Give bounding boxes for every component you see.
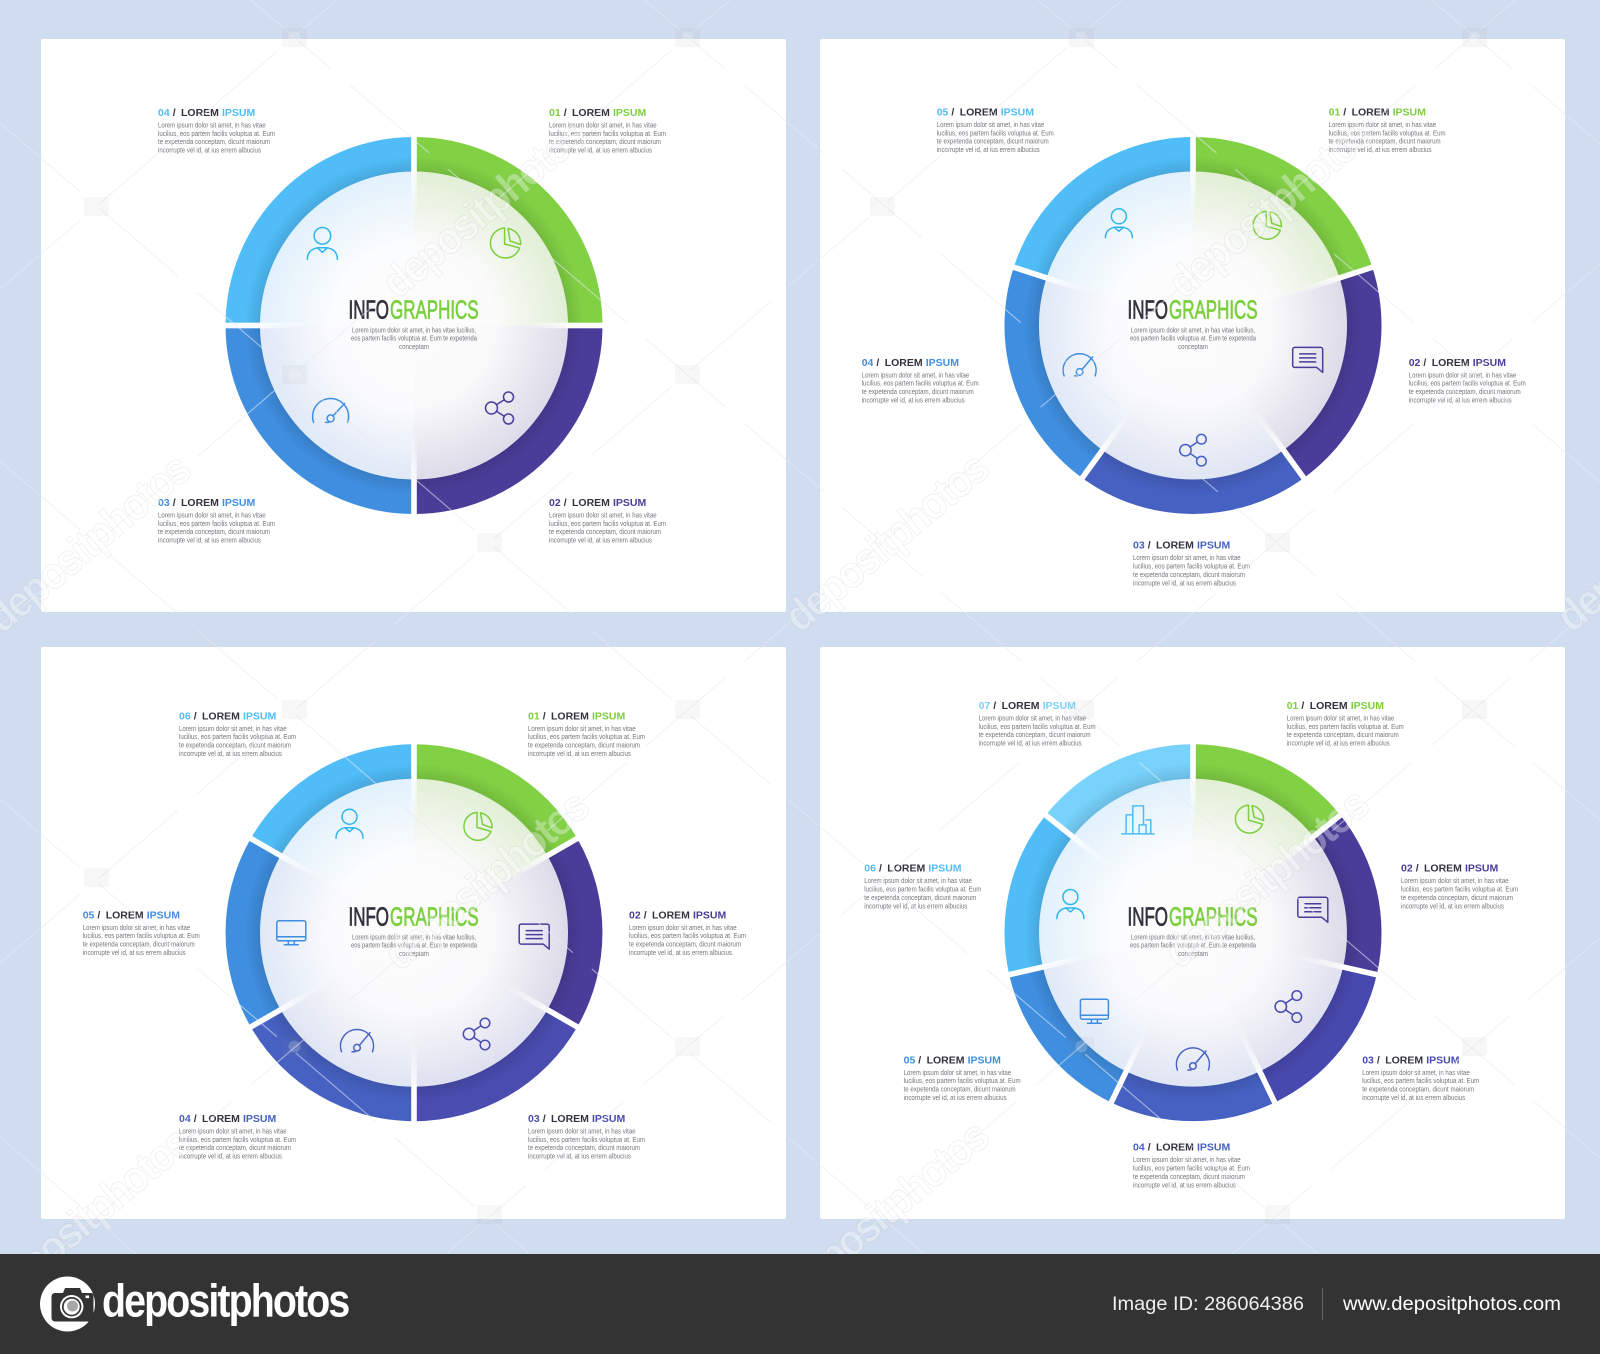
text block: 02: LOREM: [1424, 863, 1462, 875]
text block: 06: [179, 710, 296, 758]
text block: 02: LOREM: [652, 909, 690, 921]
text block: 06: te expetenda conceptam, dicunt maiorum: [179, 741, 291, 750]
text block: 01: [528, 710, 645, 758]
text block: 04: lucilius, eos partem facilis voluptua at. Eum: [158, 129, 275, 138]
text block: 04: incorrupte vel id, at ius errem albucius: [158, 146, 261, 155]
text block: 04: te expetenda conceptam, dicunt maiorum: [179, 1143, 291, 1152]
text block: 07: IPSUM: [1043, 700, 1076, 712]
text block: 02: te expetenda conceptam, dicunt maiorum: [629, 940, 741, 949]
icon: monitor: [1080, 999, 1108, 1023]
text block: 01: IPSUM: [613, 107, 647, 119]
chart: seven segment ring: [1004, 742, 1382, 1121]
chart: six segment ring: [226, 742, 602, 1124]
text block: 05: IPSUM: [968, 1054, 1001, 1066]
text block: 02: 02: [549, 497, 561, 509]
text block: 03: te expetenda conceptam, dicunt maiorum: [528, 1143, 640, 1152]
text block: 06: 06: [864, 863, 876, 875]
text block: 02: /: [564, 497, 567, 509]
text block: 02: [629, 909, 746, 957]
panel: six-step circle chart: [41, 647, 786, 1219]
panel: four-step circle chart: [41, 39, 786, 612]
watermark: repeating stock-photo marks: depositphotos: [375, 781, 597, 979]
panel: seven-step circle chart: [820, 647, 1565, 1219]
text block: 05: incorrupte vel id, at ius errem albucius: [937, 145, 1040, 154]
text block: 04: [158, 107, 275, 155]
icon: gauge: [1176, 1048, 1209, 1070]
center title: INFO: [348, 904, 389, 932]
text block: 01: /: [564, 107, 567, 119]
text block: 01: 01: [1329, 106, 1340, 118]
center title: GRAPHICS: [1169, 296, 1258, 324]
text block: 04: IPSUM: [243, 1113, 277, 1125]
text block: 04: incorrupte vel id, at ius errem albucius: [862, 395, 965, 404]
center title: Lorem ipsum dolor sit amet, in has vitae lucilius,: [1131, 326, 1255, 334]
text block: 01: Lorem ipsum dolor sit amet, in has vitae: [1329, 120, 1436, 129]
text block: 04: 04: [179, 1113, 191, 1125]
text block: 05: te expetenda conceptam, dicunt maiorum: [937, 137, 1049, 146]
text block: 01: /: [1301, 700, 1304, 712]
text block: 07: 07: [979, 700, 990, 712]
text block: 03: incorrupte vel id, at ius errem albucius: [1133, 578, 1236, 587]
text block: 02: IPSUM: [1473, 357, 1506, 369]
text block: 01: 01: [528, 710, 540, 722]
text block: 01: IPSUM: [592, 710, 626, 722]
text block: 03: [158, 497, 275, 545]
text block: 03: Lorem ipsum dolor sit amet, in has vitae: [528, 1126, 636, 1136]
text block: 07: incorrupte vel id, at ius errem albucius: [979, 739, 1082, 748]
text block: 03: Lorem ipsum dolor sit amet, in has vitae: [158, 510, 266, 520]
icon: monitor: [277, 921, 306, 945]
text block: 02: IPSUM: [613, 497, 647, 509]
text block: 05: lucilius, eos partem facilis voluptua at. Eum: [83, 931, 200, 940]
text block: 02: 02: [1401, 863, 1413, 875]
text block: 05: IPSUM: [1001, 106, 1034, 118]
text block: 02: Lorem ipsum dolor sit amet, in has vitae: [1409, 370, 1516, 379]
text block: 04: [862, 357, 979, 404]
text block: 06: lucilius, eos partem facilis voluptua at. Eum: [864, 885, 981, 894]
text block: 01: lucilius, eos partem facilis voluptua at. Eum: [528, 732, 645, 741]
icon: gauge: [313, 398, 349, 422]
text block: 01: te expetenda conceptam, dicunt maiorum: [528, 741, 640, 750]
text block: 03: te expetenda conceptam, dicunt maiorum: [1133, 570, 1245, 579]
text block: 05: incorrupte vel id, at ius errem albucius: [904, 1093, 1007, 1102]
text block: 05: Lorem ipsum dolor sit amet, in has vitae: [904, 1068, 1011, 1077]
text block: 02: incorrupte vel id, at ius errem albucius: [1401, 901, 1504, 910]
icon: pie chart: [464, 812, 492, 840]
text block: 05: LOREM: [106, 909, 144, 921]
icon: chat bubble: [1298, 897, 1328, 922]
text block: 05: 05: [937, 106, 949, 118]
center title: [1128, 296, 1258, 351]
text block: 04: 04: [1133, 1142, 1145, 1154]
text block: 01: Lorem ipsum dolor sit amet, in has vitae: [1287, 714, 1394, 722]
text block: 04: /: [876, 357, 879, 369]
text block: 02: incorrupte vel id, at ius errem albucius: [1409, 395, 1512, 404]
text block: 01: lucilius, eos partem facilis voluptua at. Eum: [1329, 128, 1446, 137]
center title: Lorem ipsum dolor sit amet, in has vitae lucilius,: [1131, 933, 1255, 942]
text block: 03: /: [1377, 1054, 1380, 1066]
text block: 06: LOREM: [202, 710, 240, 722]
text block: 04: IPSUM: [926, 357, 959, 369]
text block: 02: te expetenda conceptam, dicunt maiorum: [1401, 893, 1513, 902]
text block: 05: lucilius, eos partem facilis voluptua at. Eum: [937, 128, 1054, 137]
center title: eos partem facilis voluptua at. Eum te expetenda: [351, 941, 478, 950]
center title: INFO: [348, 296, 389, 324]
text block: 06: /: [194, 710, 197, 722]
icon: share nodes: [486, 392, 514, 424]
text block: 01: incorrupte vel id, at ius errem albucius: [1329, 145, 1432, 154]
text block: 02: Lorem ipsum dolor sit amet, in has vitae: [1401, 876, 1509, 885]
text block: 06: te expetenda conceptam, dicunt maiorum: [864, 893, 976, 902]
text block: 06: Lorem ipsum dolor sit amet, in has vitae: [864, 876, 972, 885]
text block: 01: LOREM: [572, 107, 610, 119]
text block: 04: 04: [158, 107, 170, 119]
center title: [348, 904, 479, 958]
text block: 01: Lorem ipsum dolor sit amet, in has vitae: [549, 120, 657, 130]
text block: 05: [904, 1054, 1021, 1102]
text block: 04: LOREM: [1156, 1142, 1194, 1154]
text block: 03: lucilius, eos partem facilis voluptua at. Eum: [1362, 1076, 1479, 1085]
icon: pie chart: [1235, 805, 1264, 833]
text block: 04: te expetenda conceptam, dicunt maiorum: [862, 387, 974, 396]
text block: 02: incorrupte vel id, at ius errem albucius: [549, 536, 652, 545]
text block: 05: LOREM: [960, 106, 998, 118]
text block: 02: lucilius, eos partem facilis voluptua at. Eum: [1401, 885, 1518, 894]
text block: 01: lucilius, eos partem facilis voluptua at. Eum: [1287, 722, 1404, 731]
text block: 06: 06: [179, 710, 191, 722]
center title: [1128, 904, 1258, 958]
text block: 03: LOREM: [1156, 540, 1194, 552]
text block: 05: te expetenda conceptam, dicunt maiorum: [83, 940, 195, 949]
text block: 01: LOREM: [1352, 106, 1390, 118]
text block: 01: incorrupte vel id, at ius errem albucius: [528, 749, 631, 758]
text block: 02: IPSUM: [1465, 863, 1499, 875]
text block: 03: incorrupte vel id, at ius errem albucius: [528, 1152, 631, 1161]
watermark: repeating stock-photo marks: depositphotos: [1155, 779, 1377, 977]
text block: 01: te expetenda conceptam, dicunt maiorum: [1329, 137, 1441, 146]
text block: 04: [179, 1113, 296, 1161]
text block: 03: IPSUM: [222, 497, 256, 509]
center title: INFO: [1128, 296, 1168, 324]
text block: 01: 01: [1287, 700, 1299, 712]
center title: eos partem facilis voluptua at. Eum te expetenda: [1130, 941, 1257, 950]
text block: 02: 02: [1409, 357, 1421, 369]
text block: 06: incorrupte vel id, at ius errem albucius: [179, 749, 282, 758]
text block: 06: IPSUM: [928, 863, 962, 875]
text block: 03: IPSUM: [592, 1113, 626, 1125]
icon: pie chart: [490, 228, 521, 258]
text block: 05: IPSUM: [147, 909, 180, 921]
text block: 04: incorrupte vel id, at ius errem albucius: [1133, 1180, 1236, 1189]
text block: 01: /: [1343, 106, 1346, 118]
text block: 03: incorrupte vel id, at ius errem albucius: [1362, 1093, 1465, 1102]
text block: 07: /: [993, 700, 996, 712]
text block: 05: 05: [83, 909, 95, 921]
center title: conceptam: [399, 342, 429, 351]
text block: 03: lucilius, eos partem facilis voluptua at. Eum: [1133, 562, 1250, 571]
text block: 03: /: [1148, 540, 1151, 552]
text block: 03: Lorem ipsum dolor sit amet, in has vitae: [1362, 1068, 1470, 1077]
text block: 03: [1362, 1054, 1479, 1102]
text block: 02: LOREM: [572, 497, 610, 509]
icon: city buildings: [1122, 806, 1154, 834]
text block: 03: te expetenda conceptam, dicunt maiorum: [158, 527, 270, 536]
text block: 04: /: [1148, 1142, 1151, 1154]
text block: 03: /: [173, 497, 176, 509]
text block: 07: LOREM: [1002, 700, 1040, 712]
text block: 06: [864, 863, 981, 910]
bottom brand bar: [0, 1254, 1600, 1354]
text block: 05: /: [918, 1054, 921, 1066]
watermark: repeating stock-photo marks: depositphotos: [1159, 109, 1381, 307]
icon: chat bubble: [519, 924, 549, 949]
text block: 03: IPSUM: [1197, 540, 1231, 552]
text block: 05: [83, 909, 200, 957]
icon: share nodes: [463, 1018, 490, 1050]
text block: 03: 03: [528, 1113, 540, 1125]
text block: 02: Lorem ipsum dolor sit amet, in has vitae: [549, 510, 657, 520]
text block: 04: incorrupte vel id, at ius errem albucius: [179, 1152, 282, 1161]
center title: GRAPHICS: [390, 904, 479, 932]
text block: 04: Lorem ipsum dolor sit amet, in has vitae: [158, 120, 266, 130]
watermark: repeating stock-photo marks: depositphotos: [775, 1111, 997, 1309]
text block: 06: LOREM: [887, 863, 925, 875]
text block: 02: /: [1423, 357, 1426, 369]
text block: 06: Lorem ipsum dolor sit amet, in has vitae: [179, 724, 287, 733]
text block: 04: IPSUM: [222, 107, 256, 119]
text block: 05: lucilius, eos partem facilis voluptua at. Eum: [904, 1076, 1021, 1085]
text block: 04: /: [173, 107, 176, 119]
text block: 04: LOREM: [181, 107, 219, 119]
center title: conceptam: [399, 949, 429, 958]
text block: 02: [549, 497, 666, 545]
center title: eos partem facilis voluptua at. Eum te expetenda: [1130, 334, 1257, 342]
text block: 04: [1133, 1142, 1250, 1189]
text block: 02: te expetenda conceptam, dicunt maiorum: [549, 527, 661, 536]
text block: 04: lucilius, eos partem facilis voluptua at. Eum: [862, 379, 979, 388]
text block: 03: incorrupte vel id, at ius errem albucius: [158, 536, 261, 545]
text block: 05: /: [97, 909, 100, 921]
text block: 02: /: [1416, 863, 1419, 875]
logo wordmark: depositphotos: [102, 1276, 350, 1327]
center title: GRAPHICS: [1169, 904, 1258, 932]
text block: 06: /: [879, 863, 882, 875]
text block: 02: [1401, 863, 1518, 910]
text block: 01: [1329, 106, 1446, 154]
text block: 04: IPSUM: [1197, 1142, 1231, 1154]
panel: five-step circle chart: [820, 39, 1565, 612]
text block: 05: incorrupte vel id, at ius errem albucius: [83, 948, 186, 957]
center title: conceptam: [1178, 342, 1208, 351]
chart: five segment ring: [1004, 134, 1382, 514]
icon: person: [336, 809, 363, 838]
icon: pie chart: [1253, 211, 1281, 239]
text block: 02: Lorem ipsum dolor sit amet, in has vitae: [629, 923, 737, 932]
text block: 03: Lorem ipsum dolor sit amet, in has vitae: [1133, 553, 1241, 562]
text block: 04: /: [194, 1113, 197, 1125]
text block: 01: lucilius, eos partem facilis voluptua at. Eum: [549, 129, 666, 138]
text block: 01: [549, 107, 666, 155]
watermark: repeating stock-photo marks: depositphotos: [775, 443, 997, 641]
text block: 04: Lorem ipsum dolor sit amet, in has vitae: [862, 370, 969, 379]
text block: 03: [528, 1113, 645, 1161]
text block: 07: te expetenda conceptam, dicunt maiorum: [979, 730, 1091, 739]
text block: 04: Lorem ipsum dolor sit amet, in has vitae: [1133, 1155, 1241, 1164]
text block: 05: Lorem ipsum dolor sit amet, in has vitae: [937, 120, 1044, 129]
text block: 04: 04: [862, 357, 874, 369]
icon: person: [1105, 209, 1132, 238]
text block: 04: lucilius, eos partem facilis voluptua at. Eum: [1133, 1163, 1250, 1172]
icon: gauge: [340, 1030, 374, 1052]
icon: gauge: [1063, 354, 1096, 376]
text block: 05: [937, 106, 1054, 154]
chart: four segment ring: [223, 134, 605, 516]
text block: 04: lucilius, eos partem facilis voluptua at. Eum: [179, 1135, 296, 1144]
icon: person: [307, 228, 337, 259]
text block: 04: LOREM: [885, 357, 923, 369]
text block: 01: [1287, 700, 1404, 748]
text block: 02: /: [644, 909, 647, 921]
text block: 03: lucilius, eos partem facilis voluptua at. Eum: [528, 1135, 645, 1144]
center title: [348, 296, 479, 351]
text block: 01: incorrupte vel id, at ius errem albucius: [549, 146, 652, 155]
text block: 02: [1409, 357, 1526, 404]
icon: person: [1057, 890, 1084, 918]
text block: 02: incorrupte vel id, at ius errem albucius: [629, 948, 732, 957]
text block: 04: te expetenda conceptam, dicunt maiorum: [1133, 1172, 1245, 1181]
text block: 03: LOREM: [181, 497, 219, 509]
text block: 01: LOREM: [1310, 700, 1348, 712]
text block: 02: lucilius, eos partem facilis voluptua at. Eum: [629, 931, 746, 940]
text block: 01: te expetenda conceptam, dicunt maiorum: [1287, 730, 1399, 739]
text block: 06: incorrupte vel id, at ius errem albucius: [864, 901, 967, 910]
text block: 01: te expetenda conceptam, dicunt maiorum: [549, 137, 661, 146]
text block: 02: IPSUM: [693, 909, 727, 921]
logo icon: camera in circle: [40, 1276, 95, 1332]
text block: 03: 03: [1362, 1054, 1374, 1066]
text block: 03: LOREM: [551, 1113, 589, 1125]
text block: 05: /: [951, 106, 954, 118]
text block: 07: lucilius, eos partem facilis voluptua at. Eum: [979, 722, 1096, 731]
text block: 06: IPSUM: [243, 710, 277, 722]
text block: 04: Lorem ipsum dolor sit amet, in has vitae: [179, 1126, 287, 1136]
text block: 02: 02: [629, 909, 641, 921]
text block: 07: [979, 700, 1096, 748]
text block: 01: 01: [549, 107, 561, 119]
text block: 03: 03: [1133, 540, 1145, 552]
text block: 03: 03: [158, 497, 170, 509]
text block: 03: LOREM: [1385, 1054, 1423, 1066]
icon: share nodes: [1275, 991, 1302, 1022]
center title: eos partem facilis voluptua at. Eum te expetenda: [351, 334, 478, 342]
text block: 06: lucilius, eos partem facilis voluptua at. Eum: [179, 732, 296, 741]
text block: 02: LOREM: [1432, 357, 1470, 369]
text block: 01: /: [543, 710, 546, 722]
center title: GRAPHICS: [390, 296, 479, 324]
text block: 03: IPSUM: [1426, 1054, 1460, 1066]
text block: 02: lucilius, eos partem facilis voluptua at. Eum: [549, 519, 666, 528]
text block: 07: Lorem ipsum dolor sit amet, in has vitae: [979, 714, 1086, 722]
text block: 05: 05: [904, 1054, 915, 1066]
center title: Lorem ipsum dolor sit amet, in has vitae lucilius,: [352, 326, 476, 334]
image id: Image ID: 286064386: [1112, 1293, 1304, 1315]
icon: chat bubble: [1293, 347, 1323, 372]
text block: 01: Lorem ipsum dolor sit amet, in has vitae: [528, 724, 636, 733]
text block: 04: LOREM: [202, 1113, 240, 1125]
center title: conceptam: [1178, 949, 1208, 958]
text block: 03: lucilius, eos partem facilis voluptua at. Eum: [158, 519, 275, 528]
text block: 03: [1133, 540, 1250, 587]
text block: 03: te expetenda conceptam, dicunt maiorum: [1362, 1085, 1474, 1094]
text block: 02: lucilius, eos partem facilis voluptua at. Eum: [1409, 379, 1526, 388]
text block: 01: IPSUM: [1351, 700, 1384, 712]
text block: 03: /: [543, 1113, 546, 1125]
text block: 02: te expetenda conceptam, dicunt maiorum: [1409, 387, 1521, 396]
text block: 01: incorrupte vel id, at ius errem albucius: [1287, 739, 1390, 748]
center title: Lorem ipsum dolor sit amet, in has vitae lucilius,: [352, 933, 476, 942]
center title: INFO: [1128, 904, 1168, 932]
website url: www.depositphotos.com: [1342, 1293, 1561, 1315]
text block: 05: LOREM: [927, 1054, 965, 1066]
icon: share nodes: [1180, 434, 1206, 466]
text block: 05: Lorem ipsum dolor sit amet, in has vitae: [83, 923, 190, 932]
watermark: repeating stock-photo marks: depositphotos: [373, 109, 595, 307]
text block: 04: te expetenda conceptam, dicunt maiorum: [158, 137, 270, 146]
text block: 01: LOREM: [551, 710, 589, 722]
text block: 01: IPSUM: [1393, 106, 1426, 118]
text block: 05: te expetenda conceptam, dicunt maiorum: [904, 1085, 1016, 1094]
